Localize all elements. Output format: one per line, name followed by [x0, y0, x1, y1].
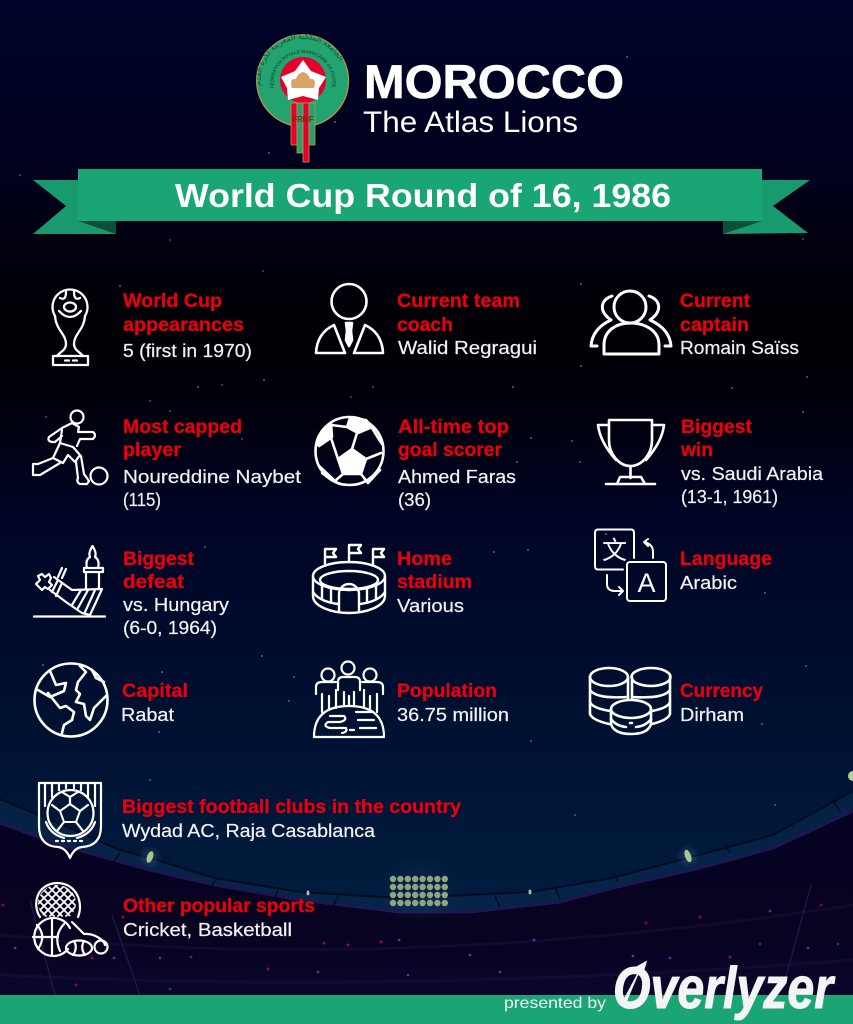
icon: stadium: [313, 545, 385, 613]
label line 2: defeat: [123, 572, 185, 593]
item: Current team coach: [316, 284, 537, 358]
footer bar: [0, 995, 853, 1024]
icon: population on globe: [314, 662, 384, 737]
translate letter: A: [637, 568, 656, 598]
presented by: presented by: [504, 995, 606, 1012]
value: Wydad AC, Raja Casablanca: [122, 821, 376, 841]
value: Dirham: [680, 705, 744, 725]
ribbon banner: [33, 169, 810, 234]
item: Population: [314, 662, 509, 737]
ribbon heading: World Cup Round of 16, 1986: [175, 177, 671, 214]
translate glyph: 文: [602, 537, 627, 565]
label line 2: goal scorer: [398, 440, 503, 461]
crest white star: [281, 60, 326, 100]
ribbon main band: [78, 169, 762, 221]
value: Ahmed Faras: [398, 467, 516, 487]
value: Various: [397, 596, 464, 616]
value: Walid Regragui: [398, 338, 537, 358]
crest ribbons: [291, 103, 315, 162]
value: 36.75 million: [397, 705, 509, 725]
item: Capital: [34, 664, 188, 736]
crest Arabic ring text: الجامعة الملكية المغربية لكرة القدم: [256, 33, 345, 86]
label line 2: stadium: [397, 572, 472, 593]
icon: sports equipment: [30, 876, 108, 956]
icon: soccer ball: [316, 417, 384, 485]
item: Home stadium: [313, 545, 472, 616]
label: Home: [397, 549, 452, 570]
icon: translate: [595, 530, 666, 601]
item: Other popular sports: [30, 876, 315, 956]
crest disc: [257, 35, 349, 127]
label line 2: coach: [397, 315, 453, 336]
label: Language: [680, 549, 772, 570]
item: World Cup appearances: [52, 289, 252, 365]
background: stadium: [0, 771, 853, 1024]
value: Arabic: [680, 573, 737, 593]
icon: globe: [34, 664, 108, 736]
label: Other popular sports: [123, 896, 315, 917]
label: Biggest: [681, 417, 753, 438]
label: Biggest: [123, 549, 195, 570]
sponsor: presented by Overlyzer: [504, 956, 836, 1021]
value line 2: (115): [123, 490, 161, 510]
item: All-time top goal scorer: [316, 417, 516, 510]
value: Rabat: [121, 705, 174, 725]
label: Capital: [122, 681, 188, 702]
label: Currency: [680, 681, 763, 702]
icon: trophy cup: [598, 420, 664, 484]
label line 2: captain: [680, 315, 749, 336]
value line 2: (13-1, 1961): [681, 487, 778, 507]
label line 2: player: [123, 440, 182, 461]
value: Noureddine Naybet: [123, 467, 301, 487]
value: vs. Saudi Arabia: [681, 464, 824, 484]
icon: football player: [33, 410, 108, 484]
item: Biggest defeat: [34, 546, 229, 638]
value line 2: (6-0, 1964): [123, 618, 217, 638]
value: vs. Hungary: [123, 595, 229, 615]
crest red disc: [280, 57, 326, 103]
icon: coach: [316, 284, 383, 353]
item: Biggest win: [598, 417, 824, 507]
crest letters: FRMF: [292, 115, 314, 124]
value: Cricket, Basketball: [123, 920, 292, 940]
label line 2: win: [680, 440, 713, 461]
title: Morocco: MOROCCO: [364, 55, 624, 108]
icon: club shield: [39, 783, 101, 858]
label: Biggest football clubs in the country: [122, 797, 461, 818]
label: Most capped: [123, 417, 242, 438]
label: Current: [680, 291, 751, 312]
logo: FRMF crest: [256, 33, 350, 162]
subtitle: The Atlas Lions: The Atlas Lions: [363, 106, 578, 139]
ribbon left tail: [33, 180, 116, 234]
item: Language: [595, 530, 772, 601]
label: Population: [397, 681, 497, 702]
icon: fallen chess king: [34, 546, 105, 616]
value: Romain Saïss: [680, 338, 799, 358]
label: World Cup: [123, 291, 222, 312]
label: Current team: [397, 291, 520, 312]
icon: captain group: [591, 291, 671, 354]
item: Current captain: [591, 291, 799, 358]
label line 2: appearances: [123, 315, 244, 336]
ribbon right fold: [723, 221, 762, 234]
value line 2: (36): [398, 490, 431, 510]
crest crown: [291, 72, 315, 88]
item: Currency: [590, 668, 763, 734]
icon: coins stacks: [590, 668, 670, 734]
ribbon left fold: [78, 221, 116, 234]
item: Biggest football clubs: [39, 783, 461, 858]
label: All-time top: [398, 417, 509, 438]
item: Most capped player: [33, 410, 301, 510]
background: stars: [19, 56, 808, 816]
logo arrow: [622, 962, 646, 1004]
ribbon right tail: [723, 180, 810, 234]
icon: world cup trophy: [52, 289, 88, 365]
value: 5 (first in 1970): [123, 341, 252, 361]
